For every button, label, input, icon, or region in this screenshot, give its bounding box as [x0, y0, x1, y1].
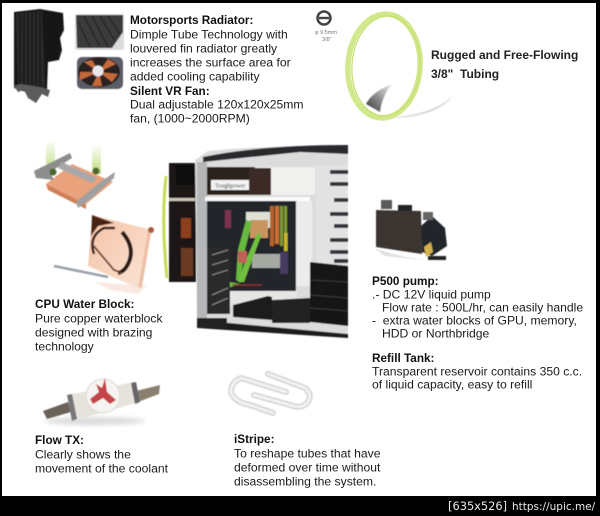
- icon: tube diameter marker: [315, 12, 337, 43]
- text: Flow TX: movement of the coolant: [35, 462, 169, 476]
- case: chassis frame: [195, 145, 348, 336]
- text: Motorsports Radiator and Silent VR Fan: Dimple Tube Technology with: [130, 28, 288, 42]
- icon: CPU water block with mount and green tubes: [34, 140, 115, 209]
- case: side mounted radiator: [164, 163, 196, 282]
- text: Motorsports Radiator and Silent VR Fan: Motorsports Radiator:: [130, 14, 253, 27]
- text: CPU Water Block: [35, 298, 163, 354]
- icon: iStripe clip: [231, 374, 310, 413]
- image: PC case with liquid cooling: [164, 145, 348, 338]
- text: Refill Tank: [372, 352, 582, 392]
- text: Flow TX: Clearly shows the: [35, 448, 131, 462]
- text: iStripe: To reshape tubes that have: [234, 446, 381, 460]
- icon: tube diameter marker: 3/8": [322, 37, 332, 43]
- text: Motorsports Radiator and Silent VR Fan: Dual adjustable 120x120x25mm: [130, 98, 303, 112]
- icon: tube diameter marker: φ 9.5mm: [315, 30, 337, 36]
- icon: polished copper block: [54, 215, 154, 294]
- case: motherboard: [207, 201, 296, 314]
- watermark: https://upic.me/: [512, 501, 596, 513]
- text: P500 pump: [372, 275, 583, 340]
- case: drive bays: [310, 165, 348, 326]
- icon: louvered fin radiator closeup: [75, 14, 124, 50]
- watermark: [635x526]: [448, 499, 507, 513]
- text: CPU Water Block: CPU Water Block:: [35, 298, 134, 311]
- text: Refill Tank: Transparent reservoir contains 350 c.c.: [372, 364, 582, 378]
- text: tubing label: Rugged and Free-Flowing: [431, 48, 578, 62]
- case: chassis frame: Toughpower: [215, 184, 245, 190]
- text: Refill Tank: Refill Tank:: [372, 352, 434, 365]
- text: P500 pump: HDD or Northbridge: [382, 326, 490, 340]
- text: Motorsports Radiator and Silent VR Fan: added cooling capability: [130, 70, 261, 84]
- icon: radiator with fans: [14, 9, 64, 103]
- case: bottom trays: [197, 296, 348, 338]
- text: Motorsports Radiator and Silent VR Fan: increases the surface area for: [130, 56, 291, 70]
- text: Motorsports Radiator and Silent VR Fan: Silent VR Fan:: [130, 85, 210, 98]
- text: Flow TX: Flow TX:: [35, 434, 84, 447]
- watermark: [448, 499, 596, 513]
- text: P500 pump: Flow rate : 500L/hr, can easily handle: [382, 300, 583, 314]
- icon: green tubing coil: [344, 12, 453, 120]
- text: iStripe: deformed over time without: [234, 460, 381, 474]
- text: Motorsports Radiator and Silent VR Fan: louvered fin radiator greatly: [130, 42, 278, 56]
- icon: P500 pump: [374, 200, 447, 262]
- text: tubing label: 3/8" Tubing: [431, 67, 499, 81]
- icon: Flow TX indicator: [43, 378, 160, 425]
- text: tubing label: [431, 48, 578, 81]
- text: Refill Tank: of liquid capacity, easy to refill: [372, 378, 532, 392]
- icon: VR fan: [77, 57, 123, 89]
- text: CPU Water Block: technology: [35, 340, 95, 354]
- text: P500 pump: P500 pump:: [372, 275, 439, 288]
- text: CPU Water Block: designed with brazing: [35, 326, 152, 340]
- text: CPU Water Block: Pure copper waterblock: [35, 312, 163, 326]
- text: P500 pump: .- DC 12V liquid pump: [372, 288, 491, 302]
- text: Motorsports Radiator and Silent VR Fan: fan, (1000~2000RPM): [130, 112, 250, 126]
- text: iStripe: iStripe:: [234, 433, 274, 446]
- text: iStripe: [234, 433, 381, 488]
- text: P500 pump: - extra water blocks of GPU, memory,: [372, 314, 577, 328]
- text: iStripe: disassembling the system.: [234, 474, 376, 488]
- text: Flow TX: [35, 434, 169, 476]
- text: Motorsports Radiator and Silent VR Fan: [130, 14, 303, 126]
